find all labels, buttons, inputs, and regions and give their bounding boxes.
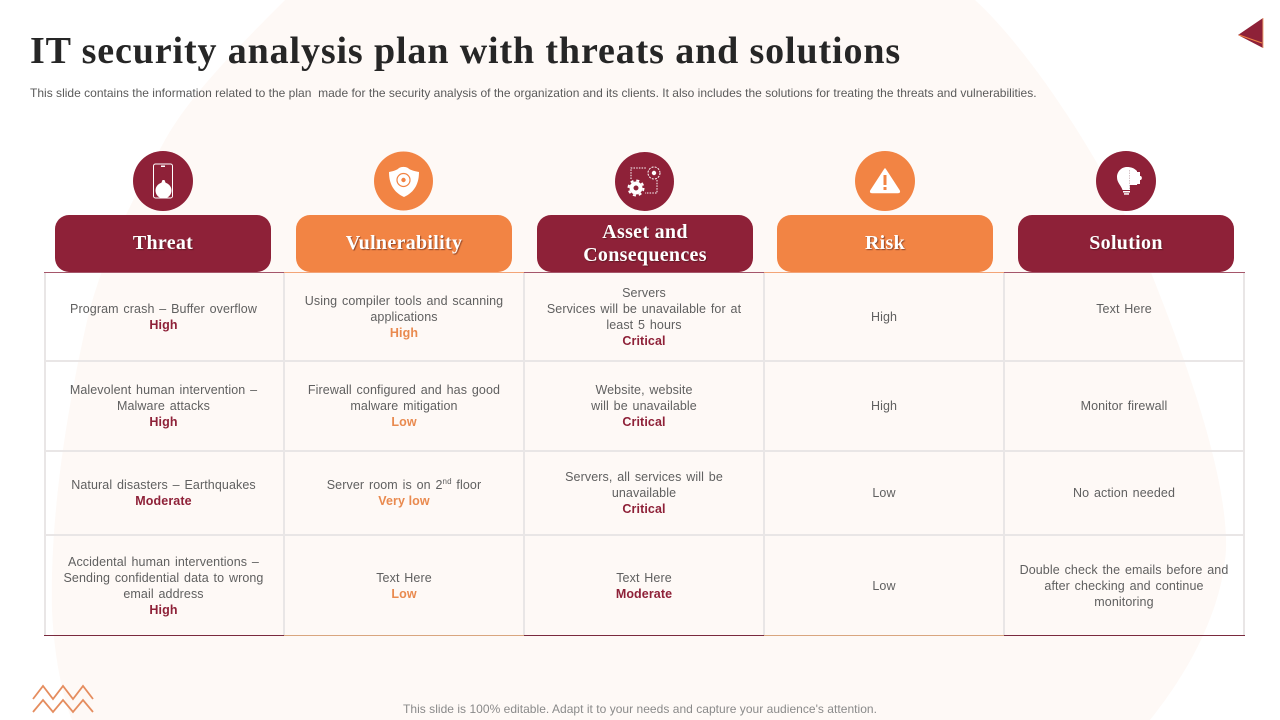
row 4 asset: Text Here <box>616 570 672 584</box>
row 1 vulnerability <box>285 273 525 362</box>
table <box>44 273 1245 636</box>
row 3 asset: unavailable <box>612 486 676 500</box>
header: Vulnerability <box>296 215 512 272</box>
header: Threat: Threat <box>133 232 193 254</box>
row 2 risk: High <box>871 399 897 413</box>
row 4 threat: email address <box>123 586 204 600</box>
icon: corner triangle arrow <box>1238 18 1264 48</box>
row 2 asset <box>525 362 765 452</box>
icon: risk warning triangle <box>855 151 915 211</box>
subtitle text: This slide contains the information related to the plan made for the security analysis of the organization and its clients. It also includes the solutions for treating the threats and vulnerabilities. <box>30 86 1037 100</box>
row 4 asset: Moderate <box>616 586 672 600</box>
row 3 solution: No action needed <box>1073 486 1175 500</box>
row 3 threat: Moderate <box>135 494 192 508</box>
row 4 threat: High <box>149 602 178 616</box>
row 1 vulnerability: High <box>390 326 418 340</box>
row 4 risk: Low <box>872 578 896 592</box>
row 1 asset: Critical <box>622 334 666 348</box>
row 4 threat <box>44 536 285 635</box>
row 1 asset <box>525 273 765 362</box>
row 4 asset <box>525 536 765 635</box>
row 4 solution: Double check the emails before and <box>1020 562 1228 576</box>
row 3 risk: Low <box>872 486 896 500</box>
row 1 asset: Services will be unavailable for at <box>547 302 741 316</box>
footer note: This slide is 100% editable. Adapt it to your needs and capture your audience's attention. <box>403 702 877 716</box>
row 3 risk <box>765 452 1005 536</box>
icon: solution bulb with puzzle <box>1096 151 1156 211</box>
row 1 vulnerability: Using compiler tools and scanning <box>305 294 503 308</box>
row 4 solution: monitoring <box>1094 594 1154 608</box>
row 4 risk <box>765 536 1005 635</box>
row 1 threat: High <box>149 318 178 332</box>
row 1 asset: least 5 hours <box>606 318 682 332</box>
header: Risk: Risk <box>865 232 905 254</box>
row 2 asset: Website, website <box>595 383 693 397</box>
row 2 vulnerability: malware mitigation <box>350 399 458 413</box>
row 1 risk: High <box>871 310 897 324</box>
row 3 asset <box>525 452 765 536</box>
header: Solution <box>1018 215 1234 272</box>
row 2 solution: Monitor firewall <box>1081 399 1167 413</box>
table top rule <box>44 272 1245 273</box>
row 4 vulnerability <box>285 536 525 635</box>
row 1 solution <box>1005 273 1245 362</box>
row 1 solution: Text Here <box>1096 302 1152 316</box>
row 4 threat: Sending confidential data to wrong <box>63 570 264 584</box>
header: Vulnerability: Vulnerability <box>346 232 462 254</box>
row 1 threat <box>44 273 285 362</box>
row 3 vulnerability: Server room is on 2nd floor <box>327 477 481 492</box>
icon: zigzag decoration <box>32 684 94 714</box>
header: Risk <box>777 215 993 272</box>
row 2 vulnerability <box>285 362 525 452</box>
row 1 risk <box>765 273 1005 362</box>
row 3 asset: Critical <box>622 502 666 516</box>
row 4 vulnerability: Low <box>391 586 417 600</box>
row 2 vulnerability: Firewall configured and has good <box>308 383 500 397</box>
row 2 threat <box>44 362 285 452</box>
row 4 solution: after checking and continue <box>1044 578 1204 592</box>
row 1 threat: Program crash – Buffer overflow <box>70 302 257 316</box>
title: IT security analysis plan with threats and solutions <box>30 30 901 72</box>
row 2 vulnerability: Low <box>391 415 417 429</box>
icon: vulnerability shield <box>374 152 433 210</box>
row 3 asset: Servers, all services will be <box>565 470 723 484</box>
row 2 risk <box>765 362 1005 452</box>
row 2 asset: will be unavailable <box>591 399 697 413</box>
header: Threat <box>55 215 271 272</box>
row 2 threat: Malevolent human intervention – <box>70 383 257 397</box>
row 2 threat: Malware attacks <box>117 399 210 413</box>
row 3 solution <box>1005 452 1245 536</box>
row 3 vulnerability <box>285 452 525 536</box>
row 1 vulnerability: applications <box>370 310 438 324</box>
header: Asset and Consequences: Consequences <box>583 244 707 266</box>
row 4 vulnerability: Text Here <box>376 570 432 584</box>
row 3 threat <box>44 452 285 536</box>
row 4 threat: Accidental human interventions – <box>68 554 259 568</box>
header: Solution: Solution <box>1089 232 1163 254</box>
row 2 solution <box>1005 362 1245 452</box>
row 1 asset: Servers <box>622 286 666 300</box>
icon: threat phone with bomb <box>133 151 193 211</box>
header: Asset and Consequences: Asset and <box>602 220 688 242</box>
row 3 vulnerability: Very low <box>378 494 430 508</box>
header: Asset and Consequences <box>537 215 753 272</box>
row 2 threat: High <box>149 415 178 429</box>
icon: asset gears <box>615 152 674 211</box>
table bottom rule <box>44 635 1245 636</box>
row 4 solution <box>1005 536 1245 635</box>
row 2 asset: Critical <box>622 415 666 429</box>
row 3 threat: Natural disasters – Earthquakes <box>71 478 256 492</box>
